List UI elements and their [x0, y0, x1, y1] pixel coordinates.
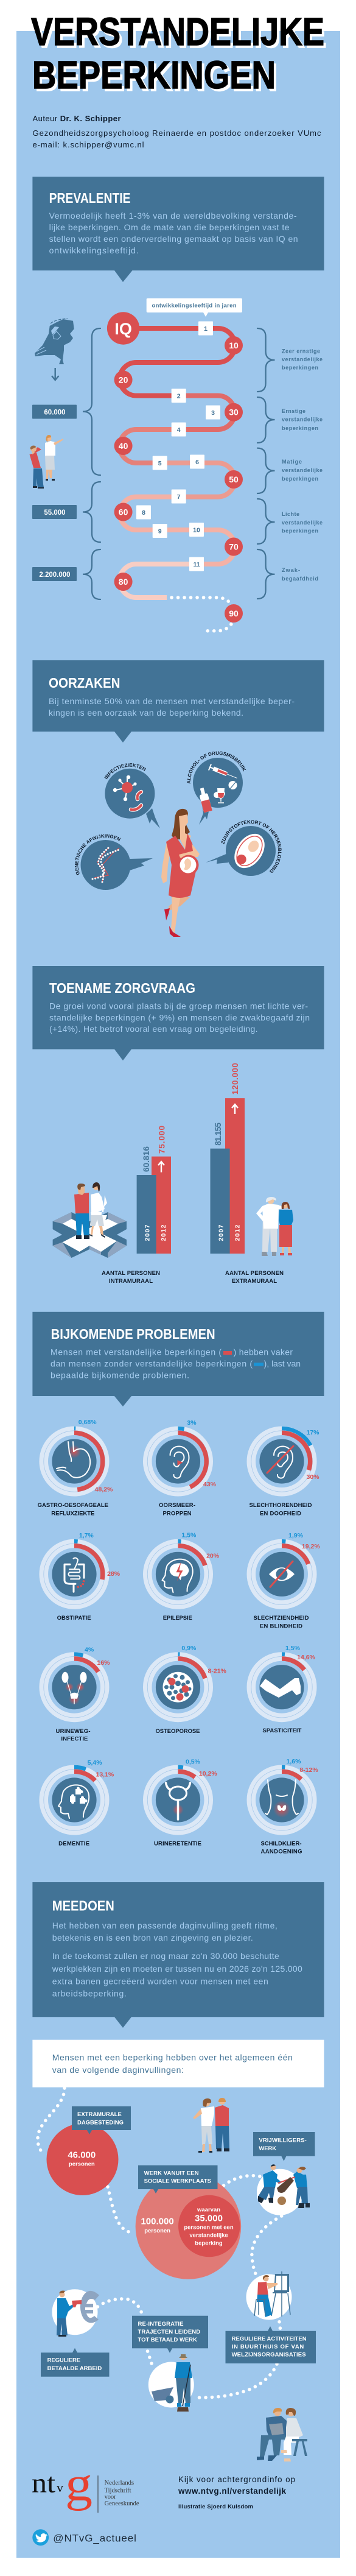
logo: ntvg: g	[65, 2458, 92, 2511]
panel: prevalentie	[32, 177, 324, 282]
logo: ntvg: Nederlands	[105, 2480, 134, 2486]
label: zeer ernstig: verstandelijke	[282, 356, 323, 362]
bubble: alcohol- of drugsmisbruik: ALCOHOL- OF DRUGSMISBRUIK	[187, 751, 246, 783]
bubble: 46.000	[46, 2123, 118, 2195]
bubble: genetische afwijkingen	[74, 834, 153, 890]
text: toename body: (+14%). Het betrof vooral een vraag om begeleiding.	[49, 1024, 258, 1034]
value: people without disability: 0,5%	[186, 1759, 201, 1766]
text: bijkomende body: Mensen met verstandelijke beperkingen (	[51, 1347, 222, 1357]
count: 55.000	[32, 505, 77, 519]
IQ value numbers: 90	[229, 609, 239, 618]
icon: spastic arm	[260, 1678, 301, 1698]
tag: vrijwilligerswerk: WERK	[259, 2145, 276, 2152]
label	[253, 1615, 309, 1630]
icon: head with lightning	[162, 1559, 193, 1592]
text: bijkomende body: bepaalde bijkomende problemen.	[51, 1370, 189, 1380]
woman	[89, 1182, 107, 1238]
tag: reguliere activiteiten: REGULIERE ACTIVITEITEN	[232, 2336, 307, 2343]
text: meedoen body: arbeidsbeperking.	[52, 1989, 127, 1999]
label: INFECTIE	[61, 1736, 88, 1743]
icon: virus	[113, 775, 137, 801]
label	[250, 1502, 312, 1517]
IQ value numbers: 50	[229, 475, 239, 484]
label: licht	[282, 511, 323, 534]
bubble: genetische afwijkingen: GENETISCHE AFWIJKINGEN	[74, 834, 120, 875]
hair	[172, 809, 190, 839]
bar years	[144, 1224, 167, 1241]
tag: re-integratie: TOT BETAALD WERK	[138, 2337, 197, 2343]
bubble: 100.000 with 35.000: personen	[144, 2228, 170, 2234]
value: people with disability: 10,2%	[199, 1770, 217, 1777]
icon: crossed eye	[269, 1561, 295, 1587]
bar chart: intramuraal	[137, 1126, 171, 1254]
icon: kidneys and bladder	[62, 1672, 86, 1705]
bubble: infectieziekten: INFECTIEZIEKTEN	[105, 763, 146, 780]
tag: reguliere betaalde arbeid: BETAALDE ARBEID	[47, 2365, 102, 2372]
ring: epilepsie	[145, 1532, 220, 1621]
icon: intestines	[65, 1558, 84, 1592]
age numbers: 6	[195, 459, 199, 466]
dress	[166, 833, 196, 898]
text: prevalentie body: stellen wordt een onderverdeling gemaakt op basis van IQ en	[49, 234, 298, 244]
icon: crossed ear	[267, 1446, 293, 1478]
ring: urineweginfectie	[41, 1646, 110, 1743]
label: matig: verstandelijke	[282, 467, 323, 473]
label: PROPPEN	[163, 1511, 192, 1517]
tag: werk vanuit een sociale werkplaats	[138, 2165, 218, 2193]
value: people without disability: 1,6%	[287, 1758, 301, 1765]
count: 55.000: 55.000	[44, 509, 66, 517]
icon: pills	[213, 781, 237, 799]
value: people without disability: 1,7%	[79, 1532, 94, 1539]
age boxes	[136, 322, 220, 571]
icon: stomach	[57, 1442, 90, 1478]
white intro box: van de volgende daginvullingen:	[52, 2065, 184, 2075]
text: meedoen body	[52, 1921, 302, 1999]
age numbers	[142, 325, 215, 568]
value: people with disability: 28%	[107, 1570, 120, 1578]
value: people with disability: 48,2%	[95, 1486, 113, 1494]
bubble: 100.000 with 35.000: verstandelijke	[189, 2232, 228, 2239]
tag: werk vanuit een sociale werkplaats: SOCIALE WERKPLAATS	[144, 2178, 211, 2185]
IQ value numbers: 30	[229, 408, 239, 417]
illustration: man with wheelbarrow and broom	[141, 2354, 194, 2412]
author block: Gezondheidszorgpsycholoog Reinaerde en postdoc onderzoeker VUmc	[33, 129, 321, 138]
text: prevalentie body	[49, 211, 298, 255]
IQ value numbers: 10	[229, 341, 239, 350]
icon: bottle	[198, 787, 212, 813]
label: licht: beperkingen	[282, 528, 318, 534]
logo: ntvg	[32, 2458, 139, 2513]
text: meedoen body: extra banen gecreëerd worden voor mensen met een	[52, 1977, 268, 1986]
ring: slechthorendheid en doofheid	[249, 1428, 319, 1517]
IQ circle	[107, 312, 139, 345]
ring: slechtziendheid en blindheid	[249, 1532, 320, 1630]
icon: porous bone	[163, 1672, 194, 1703]
heading: prevalentie: PREVALENTIE	[49, 190, 131, 206]
icon: head with puzzle pieces	[58, 1785, 89, 1818]
label: AANDOENING	[260, 1849, 302, 1855]
bubble: 100.000 with 35.000: beperking	[195, 2240, 223, 2246]
IQ value numbers: 20	[119, 375, 128, 385]
bubble: 100.000 with 35.000: 100.000	[141, 2217, 174, 2227]
title: BEPERKINGEN	[35, 55, 278, 99]
value: people with disability: 30%	[306, 1473, 319, 1481]
author block: Auteur Dr. K. Schipper	[33, 114, 120, 123]
count: 2.200.000	[32, 567, 77, 581]
title: BEPERKINGEN	[32, 53, 276, 97]
age numbers: 10	[193, 526, 200, 534]
tag: re-integratie: TRAJECTEN LEIDEND	[138, 2329, 200, 2335]
arrow: down from map	[52, 368, 58, 380]
label: OORSMEER-	[159, 1502, 195, 1509]
bar years: 2007	[144, 1224, 151, 1241]
logo: ntvg: v	[57, 2480, 63, 2495]
tag: reguliere activiteiten: IN BUURTHUIS OF VAN	[232, 2344, 304, 2351]
bar values: 81.155	[214, 1123, 223, 1146]
count: 60.000: 60.000	[44, 409, 66, 417]
age numbers: 11	[193, 561, 200, 568]
axis labels: AANTAL PERSONEN	[225, 1270, 284, 1277]
icon: twitter bird	[36, 2533, 47, 2542]
illustration: man and woman looking	[29, 435, 63, 489]
label: matig	[282, 459, 323, 482]
value: people with disability: 43%	[203, 1481, 217, 1488]
text: bijkomende body	[51, 1347, 301, 1380]
label: SLECHTHORENDHEID	[250, 1502, 312, 1509]
bar years	[218, 1224, 241, 1241]
twitter handle	[32, 2529, 136, 2546]
ring: spasticiteit	[249, 1645, 316, 1734]
label: matig: Matige	[282, 459, 302, 465]
axis labels	[102, 1270, 284, 1285]
author block: e-mail: k.schipper@vumc.nl	[33, 140, 144, 149]
callout: ontwikkelingsleeftijd: ontwikkelingsleeftijd in jaren	[152, 302, 237, 309]
bubble: zuurstoftekort of hersenbloeding: ZUURSTOFTEKORT OF HERSENBLOEDING	[221, 820, 281, 873]
illustration: pregnant woman	[161, 809, 200, 937]
panel: toename zorgvraag	[32, 966, 324, 1060]
label: matig: beperkingen	[282, 476, 318, 482]
bar years: 2012	[234, 1224, 241, 1241]
IQ value circles	[114, 336, 243, 623]
man	[74, 1184, 89, 1239]
text: bijkomende body: ), last van	[264, 1358, 301, 1368]
tag: vrijwilligerswerk	[253, 2132, 315, 2161]
tag: reguliere activiteiten: WELZIJNSORGANISATIES	[232, 2352, 306, 2359]
logo: ntvg: voor	[105, 2494, 116, 2500]
ring: dementie	[41, 1759, 114, 1847]
label: GASTRO-OESOFAGEALE	[38, 1502, 108, 1509]
illustration: couple standing	[193, 2098, 229, 2153]
illustration: painter	[246, 2271, 292, 2320]
label: ernstig: Ernstige	[282, 408, 305, 414]
text: toename body: standelijke beperkingen (+ 9%) en mensen die zwakbegaafd zijn	[49, 1012, 310, 1022]
age numbers: 8	[142, 509, 145, 517]
label: REFLUXZIEKTE	[51, 1511, 94, 1517]
ring: obstipatie	[41, 1532, 120, 1621]
label: zwakbegaafd: Zwak-	[282, 567, 300, 573]
front arm	[179, 844, 200, 858]
label: SCHILDKLIER-	[260, 1841, 302, 1847]
value: people without disability: 0,9%	[181, 1645, 197, 1652]
bubble: alcohol- of drugsmisbruik	[187, 751, 246, 825]
value: people with disability: 13,1%	[96, 1771, 114, 1779]
dotted route between daytime activities	[38, 2088, 282, 2398]
handle text: @NTvG_actueel	[53, 2533, 136, 2544]
footer info text: Kijk voor achtergrondinfo op	[178, 2475, 295, 2484]
icon: wine glass	[217, 788, 225, 803]
bar values: 120.000	[231, 1063, 240, 1095]
text: oorzaken body	[49, 696, 295, 718]
tag: reguliere betaalde arbeid	[41, 2348, 110, 2377]
ring: urineretentie	[145, 1759, 217, 1847]
left braces with counts	[32, 328, 100, 599]
label: licht: verstandelijke	[282, 520, 323, 526]
right braces with labels	[257, 328, 323, 599]
ring: schildklieraandoening	[249, 1758, 318, 1855]
bubble: 100.000 with 35.000: 35.000	[195, 2214, 223, 2224]
age numbers: 3	[211, 409, 215, 417]
icon: map of the Netherlands	[35, 319, 74, 364]
tag: vrijwilligerswerk: VRIJWILLIGERS-	[259, 2137, 307, 2144]
panel: oorzaken	[32, 660, 324, 743]
label: zwakbegaafd	[282, 567, 318, 582]
white intro box: Mensen met een beperking hebben over het algemeen één	[52, 2053, 293, 2063]
back arm	[161, 842, 172, 883]
tag: extramurale dagbesteding	[72, 2106, 131, 2134]
heading: toename zorgvraag: TOENAME ZORGVRAAG	[49, 980, 195, 996]
bar chart: extramuraal	[211, 1063, 245, 1254]
value: people with disability: 14,6%	[297, 1654, 316, 1661]
belly with fetus	[179, 855, 198, 875]
logo: ntvg: Tijdschrift	[105, 2488, 131, 2494]
axis labels: INTRAMURAAL	[109, 1278, 153, 1285]
tag: reguliere activiteiten	[225, 2326, 316, 2363]
label: zeer ernstig: Zeer ernstige	[282, 348, 320, 355]
value: people without disability: 1,9%	[288, 1532, 304, 1539]
ring: oorsmeerproppen	[145, 1419, 217, 1517]
text: toename body	[49, 1001, 310, 1034]
bubble: 100.000 with 35.000: personen met een	[184, 2224, 234, 2231]
label: DEMENTIE	[58, 1841, 89, 1847]
face and chest	[179, 814, 191, 850]
value: people with disability: 20%	[206, 1553, 220, 1560]
label	[38, 1502, 108, 1517]
text: meedoen body: Het hebben van een passende daginvulling geeft ritme,	[52, 1921, 277, 1930]
heading: meedoen: MEEDOEN	[52, 1898, 114, 1914]
value: people without disability: 1,5%	[285, 1645, 301, 1652]
arrow: increase	[232, 1104, 238, 1114]
IQ value numbers: 60	[119, 507, 128, 517]
title	[31, 10, 327, 99]
tag: werk vanuit een sociale werkplaats: WERK VANUIT EEN	[144, 2170, 199, 2177]
panel: meedoen	[32, 1882, 324, 2028]
bar values: 75.000	[157, 1126, 167, 1154]
tag: extramurale dagbesteding: EXTRAMURALE	[77, 2111, 122, 2118]
IQ circle: IQ	[114, 320, 132, 338]
text: prevalentie body: lijke beperkingen. Om de mate van die beperkingen vast te	[49, 222, 290, 232]
bar values	[142, 1126, 167, 1172]
label: OSTEOPOROSE	[156, 1728, 200, 1735]
label: ernstig	[282, 408, 323, 431]
callout: ontwikkelingsleeftijd	[147, 298, 242, 317]
bubble: 100.000 with 35.000: waarvan	[197, 2207, 220, 2214]
IQ value numbers: 40	[119, 441, 128, 451]
age numbers: 4	[177, 426, 181, 434]
icon: neck and thyroid	[265, 1780, 298, 1818]
logo: ntvg: nt	[32, 2468, 55, 2499]
label: EPILEPSIE	[163, 1615, 192, 1621]
age numbers: 5	[158, 460, 162, 467]
author block	[33, 114, 321, 149]
illustration: couple sitting with laptop	[257, 2408, 307, 2461]
count: 60.000	[32, 404, 77, 419]
illustration: man drilling euro sign	[52, 2289, 99, 2337]
value: people without disability: 17%	[306, 1429, 319, 1436]
ring: gastro-oesofageale refluxziekte	[38, 1419, 113, 1517]
label: OBSTIPATIE	[57, 1615, 91, 1621]
white intro box	[32, 2040, 324, 2087]
text: oorzaken body: Bij tenminste 50% van de mensen met verstandelijke beper-	[49, 696, 295, 706]
tag: re-integratie: RE-INTEGRATIE	[138, 2321, 184, 2327]
illustration: isometric cross with couple	[53, 1182, 127, 1258]
age numbers: 1	[204, 325, 208, 333]
heading: bijkomende problemen: BIJKOMENDE PROBLEMEN	[51, 1326, 215, 1342]
logo: ntvg: Geneeskunde	[105, 2500, 139, 2507]
bar years: 2012	[160, 1224, 167, 1241]
value: people without disability: 1,5%	[181, 1532, 197, 1539]
tag: extramurale dagbesteding: DAGBESTEDING	[77, 2119, 124, 2126]
IQ value numbers: 80	[119, 577, 128, 587]
bar values	[214, 1063, 240, 1146]
value: people with disability: 16%	[97, 1659, 110, 1667]
label: SPASTICITEIT	[262, 1727, 302, 1734]
footer info text	[178, 2475, 295, 2510]
value: people with disability: 19,2%	[302, 1543, 320, 1550]
label	[260, 1841, 302, 1855]
label: zeer ernstig	[282, 348, 323, 371]
label: zwakbegaafd: begaafdheid	[282, 576, 318, 582]
chart: IQ and development age snake	[107, 312, 243, 631]
bar values: 60.816	[142, 1146, 151, 1172]
age numbers: 7	[177, 493, 181, 501]
illustration: woodcutters	[257, 2164, 310, 2215]
icon: bladder and urethra	[166, 1783, 190, 1819]
value: people without disability: 4%	[85, 1646, 94, 1654]
value: people without disability: 5,4%	[88, 1759, 102, 1766]
label: URINERETENTIE	[154, 1841, 201, 1847]
icon: womb with fetus	[228, 828, 271, 873]
icon: DNA	[92, 848, 119, 882]
label: SLECHTZIENDHEID	[253, 1615, 309, 1621]
footer info text: www.ntvg.nl/verstandelijk	[178, 2486, 286, 2496]
value: people without disability: 3%	[187, 1419, 197, 1427]
footer info text: Illustratie Sjoerd Kulsdom	[178, 2504, 253, 2510]
text: prevalentie body: Vermoedelijk heeft 1-3% van de wereldbevolking verstande-	[49, 211, 297, 221]
bubble: 46.000: 46.000	[68, 2150, 96, 2161]
label: licht: Lichte	[282, 511, 299, 517]
icon: ear	[170, 1446, 189, 1478]
text: meedoen body: In de toekomst zullen er nog maar zo'n 30.000 beschutte	[52, 1951, 279, 1961]
icon: bacteria	[131, 792, 141, 810]
text: meedoen body: betekenis en is een bron van zingeving en plezier.	[52, 1933, 253, 1943]
bubble: 100.000 with 35.000	[136, 2173, 241, 2279]
value: people with disability: 8-21%	[208, 1668, 227, 1675]
label	[159, 1502, 195, 1517]
icon: syringe	[209, 764, 239, 782]
label: EN BLINDHEID	[260, 1623, 302, 1630]
panel: bijkomende problemen	[32, 1312, 324, 1406]
heading: oorzaken: OORZAKEN	[49, 675, 120, 691]
IQ value numbers: 70	[229, 542, 239, 552]
label: ernstig: beperkingen	[282, 425, 318, 431]
age numbers: 9	[158, 528, 162, 535]
text: bijkomende body: ) hebben vaker	[234, 1347, 293, 1357]
label: ernstig: verstandelijke	[282, 417, 323, 423]
count: 2.200.000: 2.200.000	[39, 571, 71, 579]
label: EN DOOFHEID	[260, 1511, 301, 1517]
IQ value numbers	[119, 341, 239, 618]
age numbers: 2	[177, 392, 181, 400]
label: URINEWEG-	[56, 1728, 90, 1735]
bubble: 46.000: personen	[69, 2161, 95, 2168]
text: toename body: De groei vond vooral plaats bij de groep mensen met lichte ver-	[49, 1001, 308, 1011]
bubble: infectieziekten	[105, 763, 160, 828]
arrow: increase	[158, 1162, 164, 1172]
illustration: elderly man and woman	[256, 1197, 293, 1256]
value: people with disability: 8-12%	[299, 1766, 318, 1774]
text: meedoen body: werkplekken zijn en moeten er tussen nu en 2026 zo'n 125.000	[52, 1964, 302, 1974]
label: zeer ernstig: beperkingen	[282, 365, 318, 371]
legs and shoes	[164, 895, 190, 937]
text: oorzaken body: kingen is een oorzaak van de beperking bekend.	[49, 708, 243, 718]
value: people without disability: 0,68%	[79, 1419, 97, 1426]
tag: reguliere betaalde arbeid: REGULIERE	[47, 2357, 80, 2364]
axis labels: AANTAL PERSONEN	[102, 1270, 160, 1277]
label	[56, 1728, 90, 1743]
tag: re-integratie	[132, 2316, 208, 2353]
text: bijkomende body: dan mensen zonder verstandelijke beperkingen (	[51, 1358, 253, 1368]
axis labels: EXTRAMURAAL	[232, 1278, 277, 1285]
ring: osteoporose	[145, 1645, 227, 1735]
text: prevalentie body: ontwikkelingsleeftijd.	[49, 245, 139, 255]
bar years: 2007	[218, 1224, 225, 1241]
